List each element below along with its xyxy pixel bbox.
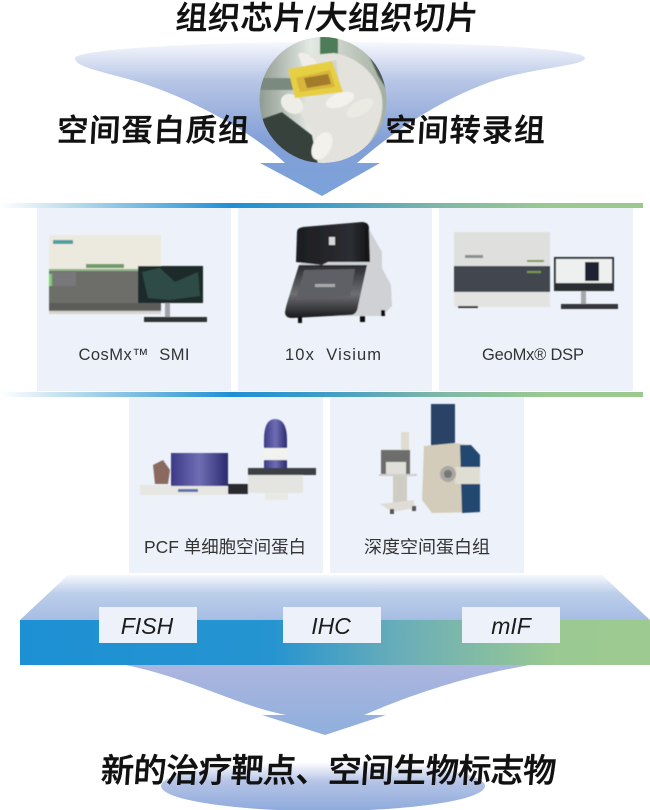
- top arrow: [75, 42, 585, 196]
- label: deep proteomics: 深度空间蛋白组: [364, 537, 490, 557]
- label: PCF: PCF 单细胞空间蛋白: [144, 537, 306, 557]
- instrument: PCF: [140, 419, 316, 500]
- instrument: GeoMx: [454, 232, 618, 309]
- gradient band: [20, 620, 650, 665]
- panel: GeoMx DSP: [439, 208, 633, 391]
- label box: mIF: mIF: [491, 613, 533, 639]
- label box: IHC: [283, 607, 381, 643]
- label: Visium: 10x Visium: [285, 346, 381, 364]
- bottom title: 新的治疗靶点、空间生物标志物: [100, 753, 557, 790]
- lower trapezoid funnel: [20, 575, 650, 620]
- instrument: CosMx: [49, 235, 207, 322]
- title: tissue chip: 组织芯片/大组织切片: [174, 0, 479, 36]
- label: GeoMx: GeoMx® DSP: [482, 346, 584, 364]
- gradient divider middle: [0, 392, 643, 397]
- panel: CosMx SMI: [37, 208, 231, 391]
- label box: mIF: [462, 607, 560, 643]
- panel: PCF: [129, 397, 323, 573]
- photo: gloved hand holding tissue chip: [259, 36, 387, 164]
- label box: IHC: IHC: [311, 613, 351, 639]
- panel: 10x Visium: [238, 208, 432, 391]
- panel: deep spatial proteomics: [330, 397, 524, 573]
- side label: spatial proteomics: 空间蛋白质组: [56, 113, 250, 148]
- bottom ellipse: [161, 761, 485, 810]
- label: CosMx: CosMx™ SMI: [78, 346, 190, 364]
- instrument: mass spectrometer: [379, 404, 480, 514]
- instrument: Visium: [285, 222, 392, 323]
- gradient divider top: [0, 203, 643, 208]
- bottom arrow: [125, 665, 530, 735]
- label box: FISH: FISH: [121, 613, 174, 639]
- label box: FISH: [99, 607, 197, 643]
- side label: spatial transcriptomics: 空间转录组: [384, 113, 546, 148]
